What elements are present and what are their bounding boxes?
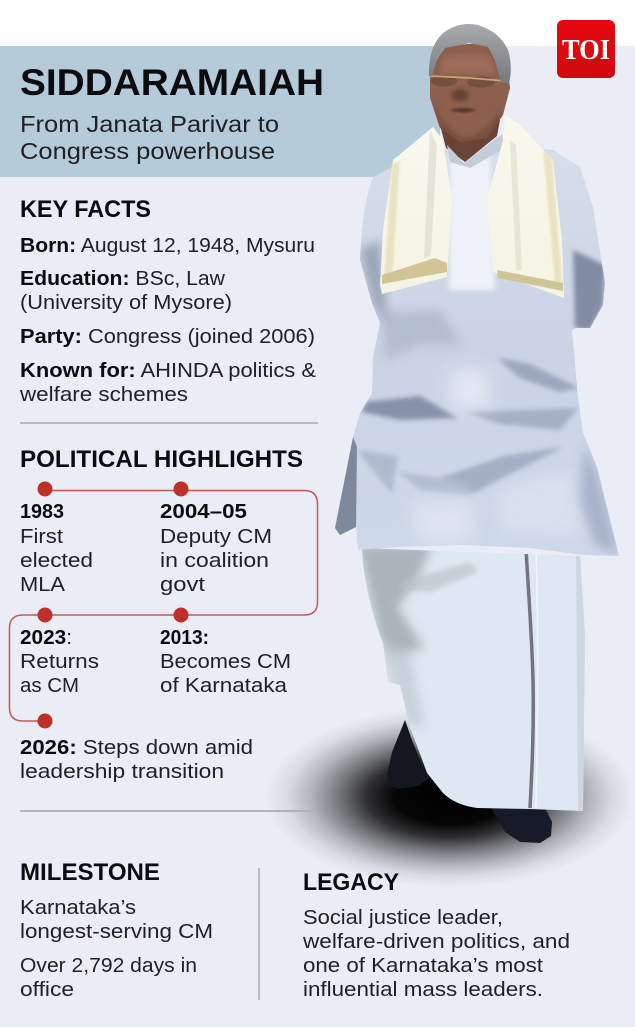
event: 1983: elected [20, 550, 93, 572]
fact: known for: Known for: AHINDA politics & [20, 360, 317, 382]
event: 2023: 2023: [20, 627, 72, 649]
event: 2013: of Karnataka [160, 675, 288, 697]
title: SIDDARAMAIAH [20, 62, 324, 103]
legacy text: one of Karnataka’s most [303, 955, 543, 977]
floor shadow [265, 707, 635, 887]
neck [440, 120, 500, 162]
fact: education: (University of Mysore) [20, 292, 232, 314]
event: 2004-05: in coalition [160, 550, 269, 572]
heading: political highlights: POLITICAL HIGHLIGHTS [20, 446, 303, 473]
heading: key facts: KEY FACTS [20, 196, 151, 223]
event: 2026: leadership transition [20, 761, 224, 783]
event: 2023 [20, 627, 99, 697]
event: 2013 [160, 627, 291, 697]
event: 1983: First [20, 526, 63, 548]
milestone text [20, 897, 213, 1001]
event: 1983: 1983 [20, 501, 64, 523]
TOI logo: TOI [562, 34, 610, 66]
hair [429, 24, 511, 84]
event: 1983 [20, 501, 93, 596]
legacy text: influential mass leaders. [303, 979, 543, 1001]
glasses [429, 76, 505, 88]
milestone text: longest-serving CM [20, 921, 213, 943]
legacy text [302, 907, 570, 1001]
event: 2026: 2026: Steps down amid [20, 737, 253, 759]
legacy text: welfare-driven politics, and [302, 931, 570, 953]
dhoti [358, 545, 585, 811]
panel: legacy [302, 869, 570, 1001]
fact: known for: welfare schemes [19, 384, 188, 406]
event: 2013: 2013: [160, 627, 209, 649]
event: 1983: MLA [20, 574, 66, 596]
face [430, 42, 510, 148]
right shoe [490, 806, 552, 843]
milestone text: office [20, 979, 74, 1001]
shawl right [487, 115, 564, 298]
TOI logo [557, 20, 615, 78]
event: 2004-05: 2004–05 [160, 501, 247, 523]
kurta folds [332, 150, 619, 555]
legacy text: Social justice leader, [303, 907, 503, 929]
left shoe [387, 720, 430, 789]
event: 2023: Returns [20, 651, 99, 673]
fact: born: Born: August 12, 1948, Mysuru [20, 235, 315, 257]
heading: legacy: LEGACY [303, 869, 399, 896]
subtitle [20, 111, 279, 164]
event: 2004-05: Deputy CM [160, 526, 272, 548]
kurta collar [447, 134, 505, 168]
event: 2004-05: govt [160, 574, 206, 596]
timeline dots [38, 482, 188, 728]
title block [20, 62, 324, 164]
event: 2004-05 [160, 501, 272, 596]
kurta body [335, 145, 619, 556]
figure: Siddaramaiah standing portrait [332, 24, 619, 843]
fact: education [20, 268, 232, 314]
milestone text: Over 2,792 days in [20, 955, 197, 977]
milestone text: Karnataka’s [20, 897, 136, 919]
event: 2026 [20, 737, 253, 783]
subtitle: From Janata Parivar to [20, 111, 279, 137]
panel: milestone [20, 859, 213, 1001]
heading: milestone: MILESTONE [20, 859, 160, 886]
event: 2013: Becomes CM [160, 651, 291, 673]
event: 2023: as CM [20, 675, 79, 697]
panel: key facts [19, 196, 317, 406]
fact: party: Party: Congress (joined 2006) [20, 326, 315, 348]
fact: education: Education: BSc, Law [20, 268, 226, 290]
panel: political highlights [10, 446, 318, 783]
header band [0, 46, 440, 177]
shawl left [380, 127, 452, 294]
fact: known for [19, 360, 317, 406]
subtitle: Congress powerhouse [20, 138, 275, 164]
timeline connector [10, 490, 318, 721]
